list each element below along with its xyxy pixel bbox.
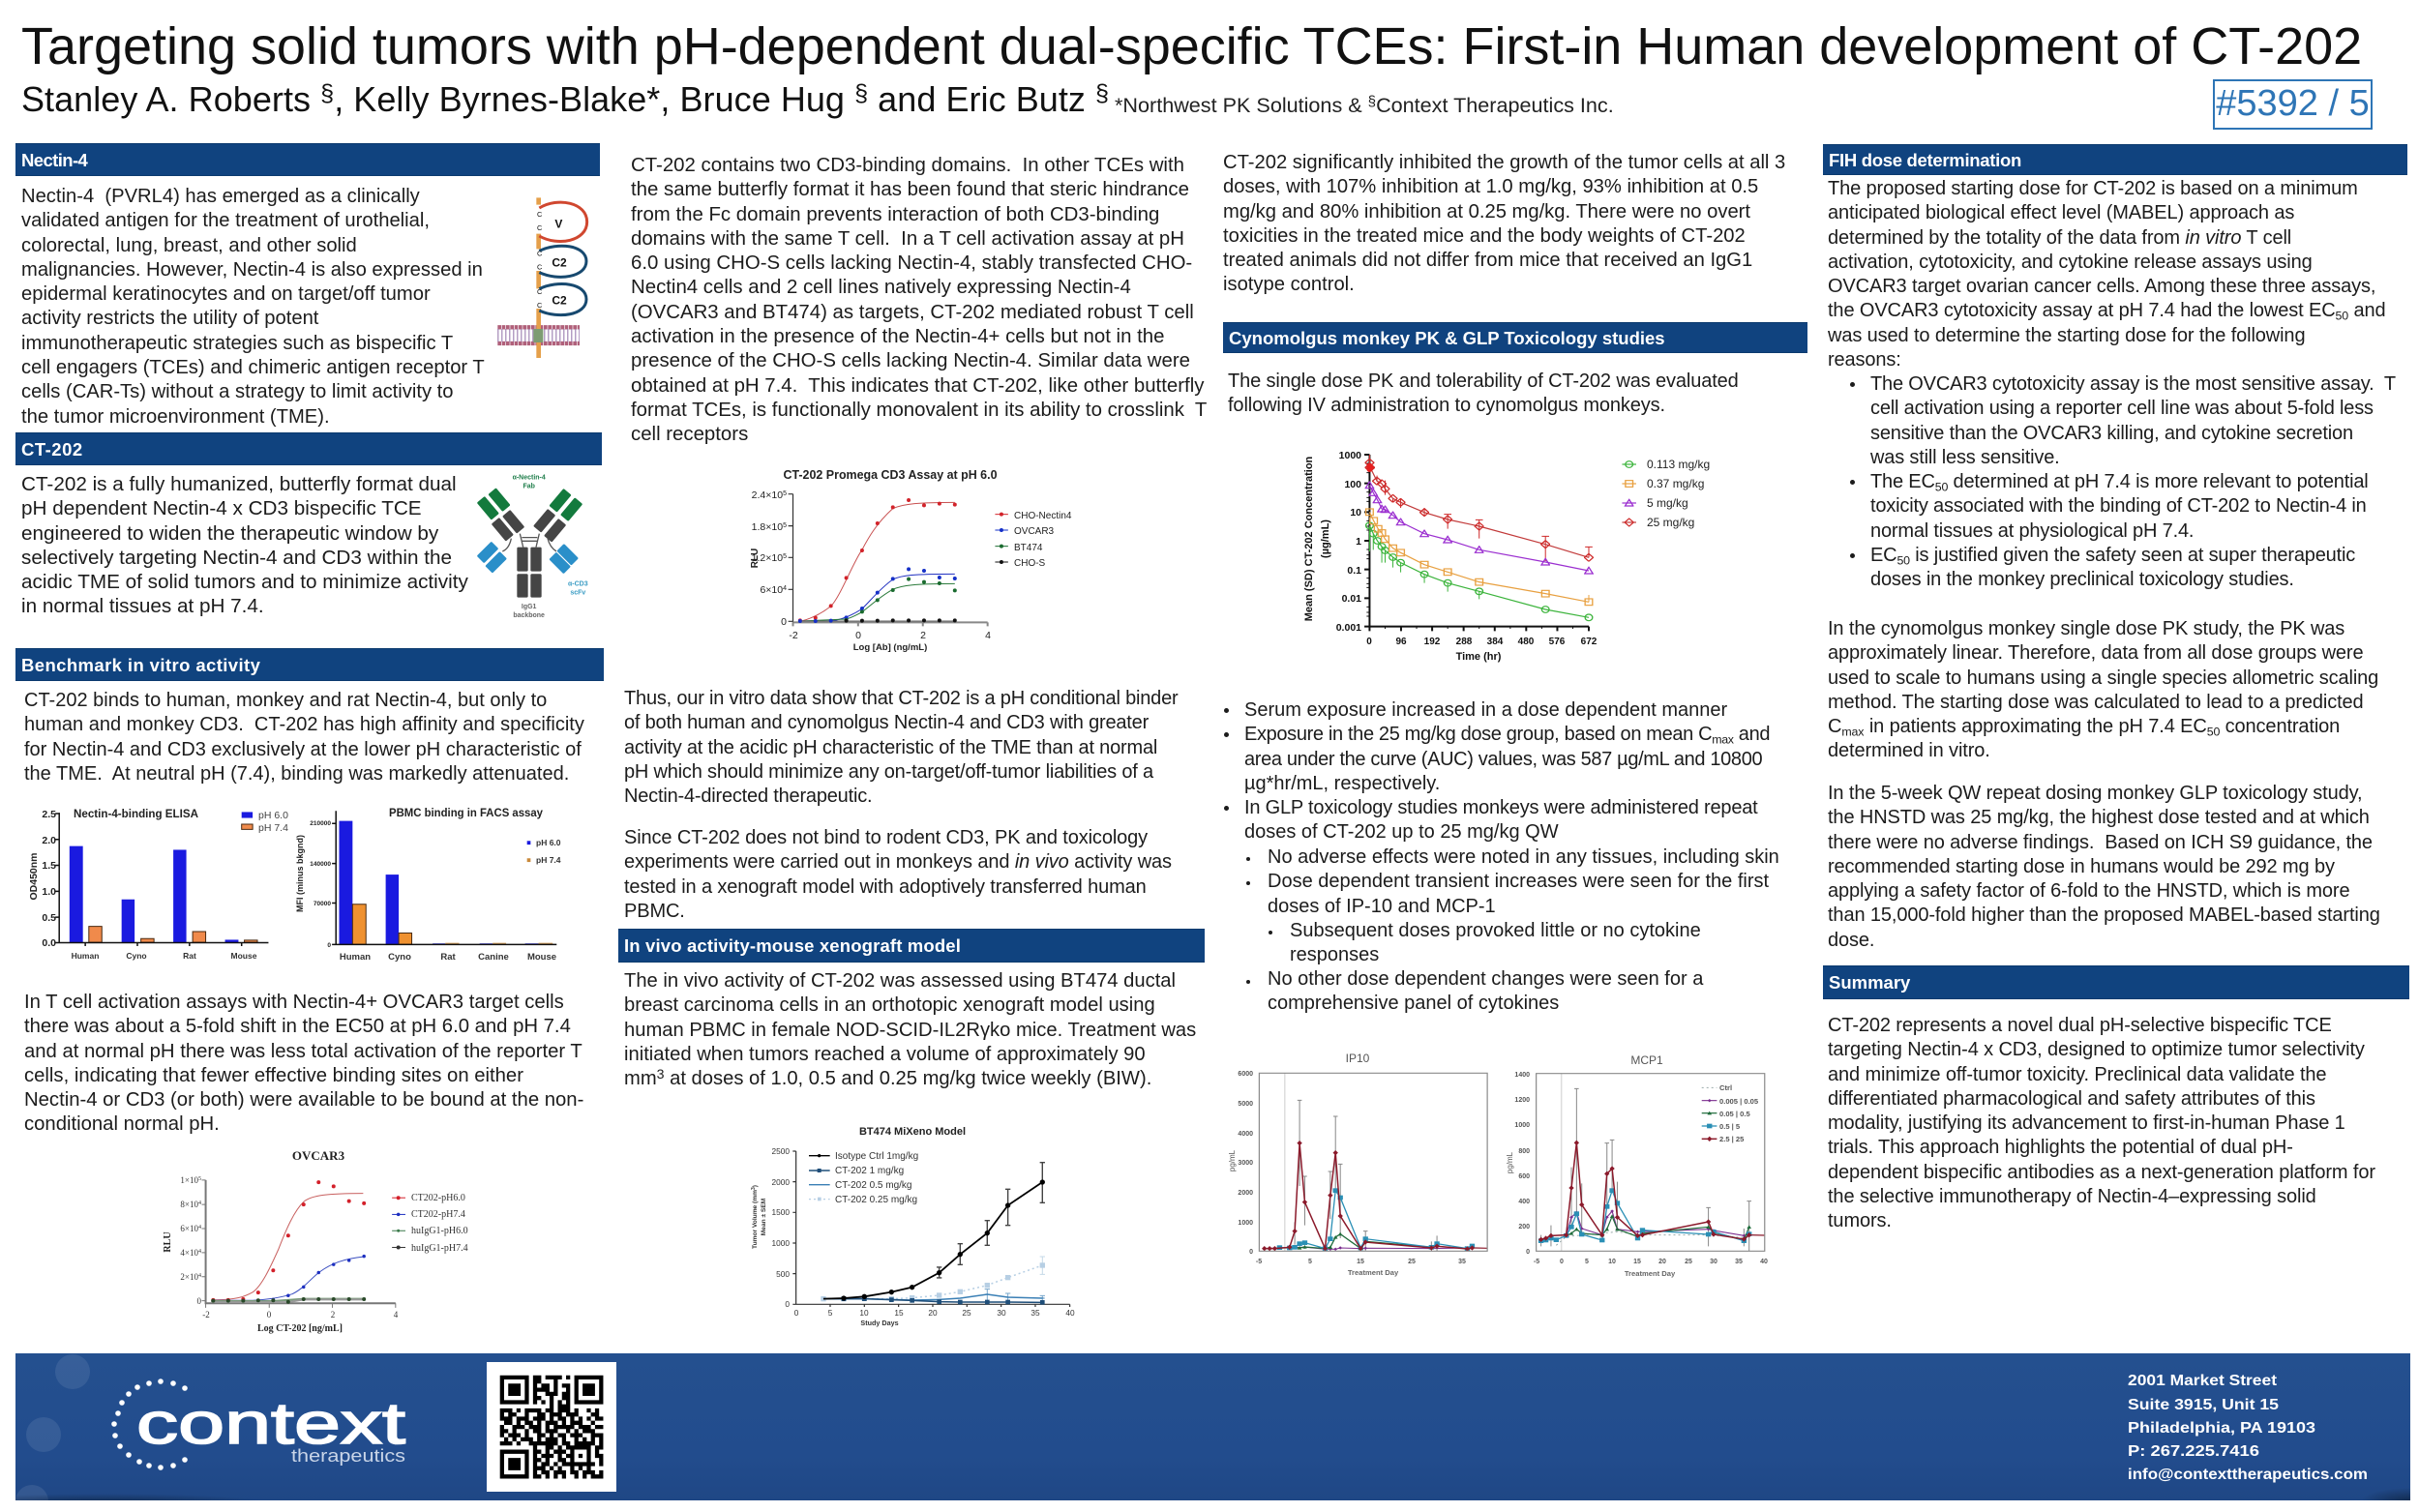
bullets: PK and toxicology findings: No other dose dependent changes were seen for a comprehensive panel of cytokines (1268, 968, 1703, 1014)
footer banner (0, 1353, 2419, 1512)
line chart: IP10 cytokine: 5000 (1238, 1101, 1253, 1108)
line chart: MCP1 cytokine: 800 (1518, 1148, 1530, 1155)
line chart: BT474 MiXeno model tumor growth: 40 (1065, 1308, 1075, 1318)
bar chart: Nectin-4-binding ELISA: 0.5 (42, 912, 56, 924)
line chart: OVCAR3 dose response: 0 (267, 1310, 272, 1319)
line chart: BT474 MiXeno model tumor growth: 0 (785, 1299, 790, 1309)
line chart: OVCAR3 dose response: 4 (198, 1225, 201, 1230)
line chart: OVCAR3 dose response: 4 (198, 1249, 201, 1255)
line chart: MCP1 cytokine: pg/mL (1506, 1151, 1514, 1173)
line chart: CT-202 concentration vs time in monkeys: 100 (1344, 479, 1361, 490)
line chart: CT-202 Promega CD3 assay at pH 6.0: 2.4×10 (752, 489, 783, 501)
line chart: IP10 cytokine: 0 (1249, 1249, 1253, 1256)
text: FIH starting dose approach: The proposed starting dose for CT-202 is based on a minimum anticipated biological effect level (MABEL) approach as determined by the totality of the data from in vitro T cell activation, cytotoxicity, and cytokine release assays using OVCAR3 target ovarian cancer cells. Among these three assays, the OVCAR3 cytotoxicity assay at pH 7.4 had the lowest EC50 and was used to determine the starting dose for the following reasons: (1828, 178, 2386, 371)
line chart: BT474 MiXeno model tumor growth: 5 (828, 1308, 833, 1318)
line chart: CT-202 concentration vs time in monkeys (1303, 450, 1710, 663)
line chart: CT-202 Promega CD3 assay at pH 6.0: 0 (781, 616, 787, 628)
line chart: CT-202 concentration vs time in monkeys: 5 mg/kg (1647, 496, 1688, 510)
line chart: CT-202 concentration vs time in monkeys: 576 (1549, 637, 1566, 647)
line chart: IP10 cytokine: 35 (1458, 1259, 1466, 1265)
line chart: BT474 MiXeno model tumor growth: 0 (794, 1308, 799, 1318)
footer address (2128, 1373, 2368, 1483)
line chart: CT-202 concentration vs time in monkeys: Time (hr) (1456, 651, 1502, 663)
section heading: Cynomolgus monkey (1223, 322, 1807, 353)
text: single dose PK: The single dose PK and tolerability of CT-202 was evaluated following IV administration to cynomolgus monkeys. (1228, 371, 1739, 416)
line chart: CT-202 Promega CD3 assay at pH 6.0: 5 (783, 490, 787, 497)
bar chart: PBMC binding in FACS assay: 210000 (310, 820, 331, 827)
icon: Nectin-4 domain diagram: C (537, 223, 543, 232)
line chart: MCP1 cytokine: Treatment Day (1625, 1269, 1676, 1278)
line chart: MCP1 cytokine: 1200 (1514, 1097, 1530, 1104)
line chart: MCP1 cytokine: Ctrl (1719, 1083, 1732, 1092)
line chart: CT-202 Promega CD3 assay at pH 6.0: OVCAR3 (1014, 526, 1055, 537)
bullets: PK and toxicology findings: Serum exposure increased in a dose dependent manner Exposure in the 25 mg/kg dose group, based on mean Cmax and area under the curve (AUC) values, was 587 µg/mL and 10800 µg*hr/mL, respectively. In GLP toxicology studies monkeys were administered repeat doses of CT-202 up to 25 mg/kg QW (1244, 699, 1770, 843)
section heading: In vivo activity (618, 929, 1205, 963)
line chart: MCP1 cytokine: 40 (1760, 1259, 1768, 1265)
line chart: MCP1 cytokine (1506, 1053, 1768, 1278)
line chart: MCP1 cytokine: 30 (1710, 1259, 1717, 1265)
line chart: CT-202 Promega CD3 assay at pH 6.0: Log [Ab] (ng/mL) (853, 642, 927, 653)
bar chart: Nectin-4-binding ELISA: 1.5 (42, 860, 56, 872)
icon: Nectin-4 domain diagram: C (537, 250, 543, 258)
bullets: PK and toxicology findings: Subsequent doses provoked little or no cytokine responses (1290, 920, 1701, 965)
bar chart: PBMC binding in FACS assay: Canine (478, 952, 509, 963)
line chart: CT-202 concentration vs time in monkeys: 0 (1366, 637, 1372, 647)
line chart: CT-202 concentration vs time in monkeys: 0.001 (1336, 622, 1361, 634)
text: in vitro conclusion: Thus, our in vitro data show that CT-202 is a pH conditional binder of both human and cynomolgus Nectin-4 and CD3 with greater activity at the acidic pH characteristic of the TME than at normal pH which should minimize any on-target/off-tumor liabilities of a Nectin-4-directed therapeutic. (624, 688, 1178, 807)
line chart: BT474 MiXeno model tumor growth: Study Days (860, 1319, 899, 1327)
bar chart: PBMC binding in FACS assay: pH 7.4 (536, 855, 561, 865)
line chart: OVCAR3 dose response: OVCAR3 (292, 1148, 345, 1163)
line chart: OVCAR3 dose response: 4×10 (180, 1248, 198, 1258)
line chart: OVCAR3 dose response (163, 1148, 468, 1334)
line chart: BT474 MiXeno model tumor growth: 1500 (772, 1207, 790, 1217)
footer address: P: 267.225.7416 (2128, 1443, 2259, 1460)
line chart: OVCAR3 dose response: huIgG1-pH7.4 (411, 1243, 468, 1254)
footer address: info@contexttherapeutics.com (2128, 1467, 2368, 1483)
line chart: OVCAR3 dose response: 5 (198, 1176, 201, 1182)
line chart: MCP1 cytokine: 1400 (1514, 1072, 1530, 1079)
bullets: reasons for starting dose: The OVCAR3 cytotoxicity assay is the most sensitive assay. T cell activation using a reporter cell line was about 5-fold less sensitive than the OVCAR3 killing, and cytokine secretion was still less sensitive. The EC50 determined at pH 7.4 is more relevant to potential toxicity associated with the binding of CT-202 to Nectin-4 in normal tissues at physiological pH 7.4. EC50 is justified given the safety seen at super therapeutic doses in the monkey preclinical toxicology studies. (1870, 373, 2396, 590)
line chart: BT474 MiXeno model tumor growth: 500 (776, 1269, 790, 1279)
line chart: MCP1 cytokine: 35 (1735, 1259, 1743, 1265)
bar chart: Nectin-4-binding ELISA: Mouse (231, 951, 257, 961)
line chart: BT474 MiXeno model tumor growth: 20 (928, 1308, 938, 1318)
line chart: BT474 MiXeno model tumor growth: BT474 MiXeno Model (859, 1126, 966, 1138)
bar chart: PBMC binding in FACS assay: Cyno (388, 952, 411, 963)
authors: Stanley A. Roberts §, Kelly Byrnes-Blake*, Bruce Hug § and Eric Butz § (21, 79, 1109, 119)
line chart: CT-202 Promega CD3 assay at pH 6.0: 4 (783, 585, 787, 592)
line chart: OVCAR3 dose response: -2 (202, 1310, 210, 1319)
line chart: CT-202 Promega CD3 assay at pH 6.0: CHO-S (1014, 558, 1046, 569)
text: GLP toxicology dose: In the 5-week QW repeat dosing monkey GLP toxicology study, the HNSTD was 25 mg/kg, the highest dose tested and at which there were no adverse findings. Based on ICH S9 guidance, the recommended starting dose in humans would be 292 mg by applying a safety factor of 6-fold to the HNSTD, which is more than 15,000-fold higher than the proposed MABEL-based starting dose. (1828, 783, 2380, 951)
bar chart: PBMC binding in FACS assay: PBMC binding in FACS assay (389, 808, 544, 819)
line chart: CT-202 Promega CD3 assay at pH 6.0: 0 (855, 630, 861, 641)
line chart: BT474 MiXeno model tumor growth: Isotype Ctrl 1mg/kg (835, 1151, 918, 1162)
text: species rationale: Since CT-202 does not bind to rodent CD3, PK and toxicology experiments were carried out in monkeys and in vivo activity was tested in a xenograft model with adoptively transferred human PBMC. (624, 827, 1172, 922)
bar chart: Nectin-4-binding ELISA: pH 6.0 (258, 810, 288, 821)
line chart: CT-202 concentration vs time in monkeys: (µg/mL) (1320, 519, 1331, 558)
line chart: CT-202 Promega CD3 assay at pH 6.0: 5 (783, 553, 787, 560)
bar chart: Nectin-4-binding ELISA: Cyno (126, 951, 147, 961)
line chart: CT-202 Promega CD3 assay at pH 6.0: 1.2×10 (752, 552, 783, 564)
bar chart: Nectin-4-binding ELISA: Nectin-4-binding ELISA (74, 809, 198, 820)
bar chart: PBMC binding in FACS assay: 70000 (314, 901, 331, 907)
line chart: CT-202 Promega CD3 assay at pH 6.0: CT-202 Promega CD3 Assay at pH 6.0 (784, 468, 998, 482)
section heading: In vivo activity: In vivo activity-mouse xenograft model (624, 935, 961, 956)
line chart: MCP1 cytokine: 600 (1518, 1173, 1530, 1180)
line chart: IP10 cytokine: 5 (1308, 1259, 1312, 1265)
line chart: IP10 cytokine: 1000 (1238, 1220, 1253, 1227)
line chart: BT474 MiXeno model tumor growth: Mean ± SEM (761, 1198, 767, 1235)
line chart: OVCAR3 dose response: huIgG1-pH6.0 (411, 1226, 468, 1236)
text: cynomolgus scaling: In the cynomolgus monkey single dose PK study, the PK was approximately linear. Therefore, data from all dose groups were used to scale to humans using a single species allometric scaling method. The starting dose was calculated to lead to a predicted Cmax in patients approximating the pH 7.4 EC50 concentration determined in vitro. (1828, 618, 2378, 761)
line chart: CT-202 concentration vs time in monkeys: 672 (1581, 637, 1598, 647)
bar chart: PBMC binding in FACS assay: 0 (327, 942, 331, 949)
text: in vivo xenograft: The in vivo activity of CT-202 was assessed using BT474 ductal breast carcinoma cells in an orthotopic xenograft model using human PBMC in female NOD-SCID-IL2Rγko mice. Treatment was initiated when tumors reached a volume of approximately 90 mm3 at doses of 1.0, 0.5 and 0.25 mg/kg twice weekly (BIW). (624, 970, 1196, 1089)
section heading: Summary (1823, 965, 2409, 999)
QR code (487, 1362, 616, 1492)
bar chart: Nectin-4-binding ELISA: 2.5 (42, 809, 56, 820)
icon: Nectin-4 domain diagram: V (554, 217, 562, 230)
line chart: MCP1 cytokine: 0 (1560, 1259, 1564, 1265)
line chart: CT-202 Promega CD3 assay at pH 6.0: RLU (750, 548, 761, 568)
line chart: CT-202 concentration vs time in monkeys: 96 (1395, 637, 1407, 647)
section heading: Cynomolgus monkey: Cynomolgus monkey PK & GLP Toxicology studies (1229, 328, 1665, 348)
line chart: CT-202 concentration vs time in monkeys: 1000 (1339, 450, 1361, 461)
line chart: MCP1 cytokine: 1000 (1514, 1122, 1530, 1129)
line chart: OVCAR3 dose response: 2 (331, 1310, 335, 1319)
line chart: IP10 cytokine (1228, 1052, 1487, 1277)
line chart: CT-202 concentration vs time in monkeys: 384 (1487, 637, 1504, 647)
footer address: Philadelphia, PA 19103 (2128, 1420, 2315, 1437)
icon: Nectin-4 domain diagram: C (537, 301, 543, 310)
section heading: Benchmark in vitro activity (15, 648, 604, 681)
text: tumor growth inhibition: CT-202 significantly inhibited the growth of the tumor cells at all 3 doses, with 107% inhibition at 1.0 mg/kg, 93% inhibition at 0.5 mg/kg and 80% inhibition at 0.25 mg/kg. There were no overt toxicities in the treated mice and the body weights of CT-202 treated animals did not differ from mice that received an IgG1 isotype control. (1223, 152, 1785, 295)
bar chart: PBMC binding in FACS assay: 140000 (310, 861, 331, 868)
line chart: BT474 MiXeno model tumor growth: Tumor Volume (mm (752, 1190, 759, 1249)
icon: CT-202 butterfly antibody diagram: α-Nectin-4 (513, 474, 546, 481)
poster title: Targeting solid tumors with pH-dependent dual-specific TCEs: First-in Human development of CT-202 (21, 17, 2362, 75)
line chart: CT-202 Promega CD3 assay at pH 6.0 (750, 468, 1072, 653)
poster number box: #5392 / 5 (2216, 83, 2370, 124)
logo: context therapeutics: therapeutics (291, 1446, 405, 1466)
line chart: CT-202 Promega CD3 assay at pH 6.0: BT474 (1014, 543, 1043, 553)
icon: CT-202 butterfly antibody diagram (477, 474, 588, 619)
line chart: BT474 MiXeno model tumor growth: 30 (997, 1308, 1006, 1318)
text: T cell activation assays: In T cell activation assays with Nectin-4+ OVCAR3 target cells there was about a 5-fold shift in the EC50 at pH 6.0 and pH 7.4 and at normal pH there was less total activation of the reporter T cells, indicating that fewer effective binding sites on either Nectin-4 or CD3 (or both) were available to be bound at the non- conditional normal pH. (24, 992, 583, 1135)
line chart: MCP1 cytokine: 5 (1585, 1259, 1589, 1265)
line chart: CT-202 Promega CD3 assay at pH 6.0: CHO-Nectin4 (1014, 511, 1072, 521)
line chart: IP10 cytokine: IP10 (1346, 1052, 1370, 1065)
line chart: MCP1 cytokine: 0.005 | 0.05 (1719, 1097, 1759, 1106)
logo: context therapeutics (111, 1379, 405, 1470)
section heading: Summary: Summary (1829, 972, 1910, 993)
line chart: CT-202 Promega CD3 assay at pH 6.0: 4 (985, 630, 991, 641)
bar chart: PBMC binding in FACS assay: Human (340, 952, 371, 963)
section heading: Benchmark in vitro activity: Benchmark in vitro activity (21, 655, 260, 675)
section heading: Nectin-4 (15, 143, 600, 176)
line chart: OVCAR3 dose response: 8×10 (180, 1200, 198, 1209)
icon: Nectin-4 domain diagram (497, 197, 587, 358)
line chart: IP10 cytokine: Treatment Day (1348, 1268, 1399, 1277)
line chart: BT474 MiXeno model tumor growth: 1000 (772, 1238, 790, 1248)
line chart: BT474 MiXeno model tumor growth: ) (752, 1185, 759, 1187)
line chart: OVCAR3 dose response: RLU (163, 1231, 173, 1253)
line chart: CT-202 concentration vs time in monkeys: 10 (1350, 507, 1361, 519)
text: CT-202 description: CT-202 is a fully humanized, butterfly format dual pH dependent Nectin-4 x CD3 bispecific TCE engineered to widen the therapeutic window by selectively targeting Nectin-4 and CD3 within the acidic TME of solid tumors and to minimize activity in normal tissues at pH 7.4. (21, 473, 468, 617)
line chart: MCP1 cytokine: 0.05 | 0.5 (1719, 1110, 1750, 1118)
line chart: MCP1 cytokine: 10 (1608, 1259, 1616, 1265)
icon: CT-202 butterfly antibody diagram: scFv (570, 590, 585, 597)
line chart: CT-202 concentration vs time in monkeys: 480 (1518, 637, 1535, 647)
line chart: IP10 cytokine: 6000 (1238, 1071, 1253, 1078)
line chart: CT-202 concentration vs time in monkeys: Mean (SD) CT-202 Concentration (1303, 456, 1315, 621)
bar chart: Nectin-4-binding ELISA: 2.0 (42, 835, 56, 846)
bar chart: PBMC binding in FACS assay (295, 808, 561, 963)
line chart: OVCAR3 dose response: CT202-pH7.4 (411, 1209, 465, 1220)
line chart: CT-202 concentration vs time in monkeys: 25 mg/kg (1647, 516, 1694, 529)
line chart: MCP1 cytokine: 20 (1658, 1259, 1666, 1265)
section heading: FIH dose determination (1823, 144, 2407, 175)
line chart: BT474 MiXeno model tumor growth: 2000 (772, 1177, 790, 1187)
line chart: OVCAR3 dose response: CT202-pH6.0 (411, 1193, 465, 1203)
footer address: 2001 Market Street (2128, 1373, 2278, 1389)
line chart: CT-202 concentration vs time in monkeys: 192 (1424, 637, 1441, 647)
line chart: MCP1 cytokine: 2.5 | 25 (1719, 1135, 1745, 1143)
line chart: IP10 cytokine: 4000 (1238, 1131, 1253, 1138)
line chart: CT-202 Promega CD3 assay at pH 6.0: 6×10 (760, 584, 783, 596)
section heading: Nectin-4: Nectin-4 (21, 150, 87, 170)
line chart: BT474 MiXeno model tumor growth: 15 (894, 1308, 904, 1318)
line chart: OVCAR3 dose response: 2×10 (180, 1272, 198, 1282)
line chart: OVCAR3 dose response: 4 (198, 1273, 201, 1279)
line chart: BT474 MiXeno model tumor growth: CT-202 1 mg/kg (835, 1166, 904, 1176)
line chart: CT-202 concentration vs time in monkeys: 0.1 (1347, 565, 1361, 577)
line chart: CT-202 Promega CD3 assay at pH 6.0: 2 (920, 630, 926, 641)
line chart: IP10 cytokine: 15 (1357, 1259, 1364, 1265)
bar chart: Nectin-4-binding ELISA: OD450nm (28, 852, 40, 901)
bar chart: PBMC binding in FACS assay: MFI (minus bkgnd) (295, 835, 305, 912)
line chart: CT-202 concentration vs time in monkeys: 0.113 mg/kg (1647, 458, 1710, 471)
line chart: CT-202 Promega CD3 assay at pH 6.0: 1.8×10 (752, 521, 783, 533)
line chart: IP10 cytokine: 25 (1408, 1259, 1416, 1265)
affiliations: *Northwest PK Solutions & §Context Therapeutics Inc. (1115, 93, 1614, 117)
bar chart: PBMC binding in FACS assay: Mouse (527, 952, 556, 963)
bar chart: PBMC binding in FACS assay: pH 6.0 (536, 838, 561, 847)
line chart: IP10 cytokine: pg/mL (1228, 1149, 1237, 1171)
bar chart: Nectin-4-binding ELISA: 0.0 (42, 937, 56, 949)
bullets: PK and toxicology findings (1224, 699, 1779, 1014)
line chart: MCP1 cytokine: MCP1 (1630, 1053, 1663, 1067)
bar chart: Nectin-4-binding ELISA: pH 7.4 (258, 822, 288, 834)
text: CD3-binding domains: CT-202 contains two CD3-binding domains. In other TCEs with the same butterfly format it has been found that steric hindrance from the Fc domain prevents interaction of both CD3-binding domains with the same T cell. In a T cell activation assay at pH 6.0 using CHO-S cells lacking Nectin-4, stably transfected CHO- Nectin4 cells and 2 cell lines natively expressing Nectin-4 (OVCAR3 and BT474) as targets, CT-202 mediated robust T cell activation in the presence of the Nectin-4+ cells but not in the presence of the CHO-S cells lacking Nectin-4. Similar data were obtained at pH 7.4. This indicates that CT-202, like other butterfly format TCEs, is functionally monovalent in its ability to crosslink T cell receptors (631, 155, 1207, 445)
line chart: BT474 MiXeno model tumor growth: 2500 (772, 1146, 790, 1156)
line chart: BT474 MiXeno model tumor growth: 10 (859, 1308, 869, 1318)
line chart: CT-202 concentration vs time in monkeys: 1 (1356, 536, 1361, 548)
text: benchmark binding: CT-202 binds to human, monkey and rat Nectin-4, but only to human and monkey CD3. CT-202 has high affinity and specificity for Nectin-4 and CD3 exclusively at the lower pH characteristic of the TME. At neutral pH (7.4), binding was markedly attenuated. (24, 690, 584, 785)
line chart: BT474 MiXeno model tumor growth: 3 (751, 1187, 757, 1190)
line chart: MCP1 cytokine: 200 (1518, 1224, 1530, 1230)
line chart: OVCAR3 dose response: 4 (198, 1201, 201, 1206)
line chart: OVCAR3 dose response: 6×10 (180, 1224, 198, 1233)
icon: CT-202 butterfly antibody diagram: IgG1 (522, 604, 537, 610)
line chart: MCP1 cytokine: 25 (1685, 1259, 1692, 1265)
line chart: BT474 MiXeno model tumor growth: 25 (962, 1308, 971, 1318)
line chart: OVCAR3 dose response: 1×10 (180, 1175, 198, 1185)
icon: CT-202 butterfly antibody diagram: backbone (513, 612, 545, 619)
line chart: OVCAR3 dose response: Log CT-202 [ng/mL] (257, 1323, 343, 1334)
bullets: PK and toxicology findings: No adverse effects were noted in any tissues, including skin Dose dependent transient increases were seen for the first doses of IP-10 and MCP-1 (1268, 846, 1779, 917)
icon: Nectin-4 domain diagram: C2 (552, 294, 567, 308)
icon: CT-202 butterfly antibody diagram: Fab (523, 483, 535, 489)
line chart: CT-202 concentration vs time in monkeys: 288 (1456, 637, 1473, 647)
icon: Nectin-4 domain diagram: C (537, 210, 543, 219)
line chart: CT-202 concentration vs time in monkeys: 0.01 (1342, 593, 1361, 605)
logo: context therapeutics: context (136, 1391, 405, 1456)
bar chart: PBMC binding in FACS assay: Rat (440, 952, 456, 963)
section heading: CT-202 (15, 432, 602, 465)
line chart: BT474 MiXeno model tumor growth: CT-202 0.5 mg/kg (835, 1180, 911, 1191)
line chart: BT474 MiXeno model tumor growth (751, 1126, 1075, 1327)
icon: CT-202 butterfly antibody diagram: α-CD3 (568, 581, 588, 588)
line chart: MCP1 cytokine: 0.5 | 5 (1719, 1122, 1741, 1131)
line chart: BT474 MiXeno model tumor growth: CT-202 0.25 mg/kg (835, 1195, 917, 1205)
line chart: IP10 cytokine: 3000 (1238, 1160, 1253, 1167)
text: Nectin-4 introduction: Nectin-4 (PVRL4) has emerged as a clinically validated antigen for the treatment of urothelial, colorectal, lung, breast, and other solid malignancies. However, Nectin-4 is also expressed in epidermal keratinocytes and on target/off tumor activity restricts the utility of potent immunotherapeutic strategies such as bispecific T cell engagers (TCEs) and chimeric antigen receptor T cells (CAR-Ts) without a strategy to limit activity to the tumor microenvironment (TME). (21, 186, 485, 428)
footer address: Suite 3915, Unit 15 (2128, 1397, 2279, 1413)
section heading: FIH dose determination: FIH dose determination (1829, 150, 2021, 170)
section heading: CT-202: CT-202 (21, 439, 83, 460)
line chart: CT-202 Promega CD3 assay at pH 6.0: -2 (789, 630, 798, 641)
line chart: OVCAR3 dose response: 0 (197, 1296, 201, 1306)
line chart: CT-202 concentration vs time in monkeys: 0.37 mg/kg (1647, 477, 1704, 490)
bar chart: Nectin-4-binding ELISA: Rat (183, 951, 196, 961)
line chart: OVCAR3 dose response: 4 (394, 1310, 399, 1319)
line chart: BT474 MiXeno model tumor growth: 35 (1030, 1308, 1040, 1318)
line chart: MCP1 cytokine: 15 (1633, 1259, 1641, 1265)
line chart: IP10 cytokine: 2000 (1238, 1190, 1253, 1197)
bar chart: Nectin-4-binding ELISA: 1.0 (42, 886, 56, 898)
icon: Nectin-4 domain diagram: C (537, 263, 543, 272)
line chart: MCP1 cytokine: 400 (1518, 1199, 1530, 1205)
line chart: IP10 cytokine: -5 (1256, 1259, 1262, 1265)
text: summary: CT-202 represents a novel dual pH-selective bispecific TCE targeting Nectin-4 x CD3, designed to optimize tumor selectivity and minimize off-tumor toxicity. Preclinical data validate the differentiated pharmacological and safety attributes of this modality, justifying its advancement to first-in-human Phase 1 trials. This approach highlights the potential of dual pH- dependent bispecific antibodies as a next-generation platform for the selective immunotherapy of Nectin-4–expressing solid tumors. (1828, 1015, 2375, 1231)
bar chart: Nectin-4-binding ELISA (28, 809, 288, 961)
icon: Nectin-4 domain diagram: C (537, 287, 543, 296)
bar chart: Nectin-4-binding ELISA: Human (72, 951, 99, 961)
line chart: MCP1 cytokine: -5 (1534, 1259, 1539, 1265)
line chart: MCP1 cytokine: 0 (1526, 1249, 1530, 1256)
line chart: CT-202 Promega CD3 assay at pH 6.0: 5 (783, 522, 787, 529)
icon: Nectin-4 domain diagram: C2 (552, 256, 567, 270)
